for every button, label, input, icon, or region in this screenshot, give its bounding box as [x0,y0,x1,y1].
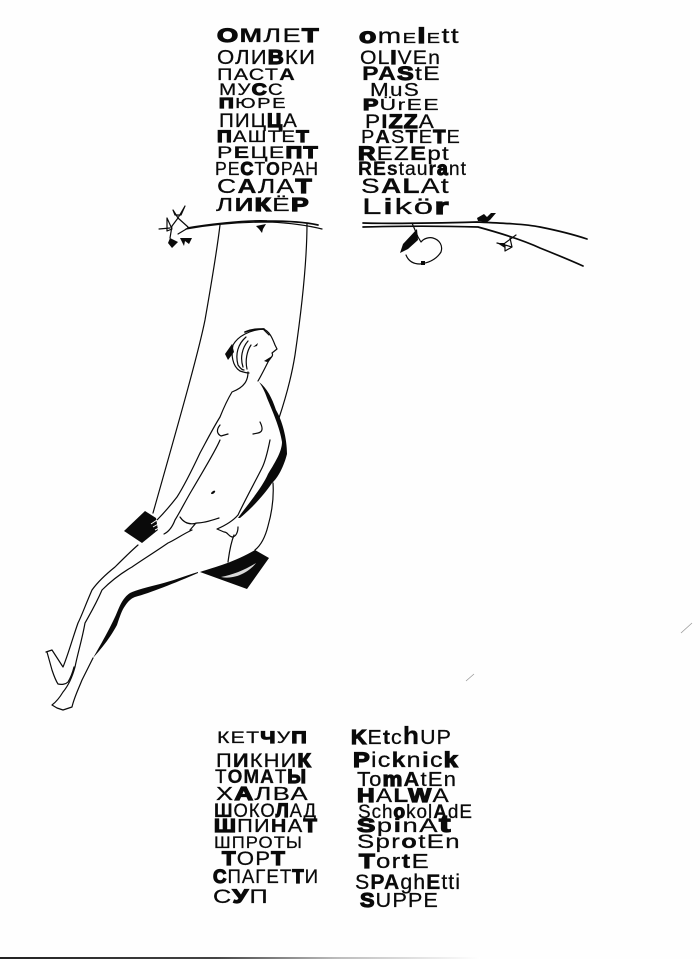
hair strands [232,330,269,373]
word list: top German column: SAL At [361,175,450,198]
word list: bottom German column: S p inA t [357,811,452,838]
branch: left with leaves [159,206,322,248]
word list: bottom Russian column: КЕТ ЧУП [217,728,308,747]
word list: bottom German column: Picknick [353,749,459,772]
word list: bottom German column: HALW A [357,786,450,807]
word list: top German column: PASTETE [361,127,461,147]
hand on seat [151,520,161,530]
word list: top German column: MuS [370,80,420,100]
word list: top German column: REstaurant [358,159,467,180]
word list: bottom German column: Tor tE [359,851,430,873]
swing rope: left [153,225,220,513]
inner arm and waist [217,440,270,537]
word list: bottom German column: SchokolAdE [358,802,473,823]
word list: bottom Russian column: Х А ЛВА [216,784,309,804]
word list: top German column: L ikö r [362,194,450,219]
word list: bottom Russian column: С УП [213,887,269,908]
word list: top German column [358,25,467,219]
word list: bottom Russian column: ШОКОЛАД [214,801,317,822]
word list: bottom German column: Spr otEn [357,832,461,853]
word list: top Russian column: П ЮРЕ [219,95,287,112]
word list: top German column: PA StE [362,64,441,85]
word list: bottom German column: TomAtEn [357,769,457,791]
icon: apple [400,223,442,265]
word list: top Russian column: Р Е ЦЕ П Т [217,143,319,162]
bottom edge shadow [0,957,480,959]
word list: bottom German column [351,722,473,912]
word list: top German column: REZ Ept [358,144,450,165]
shaded back [238,382,287,518]
swing seat: left [124,511,158,543]
leg: front [52,530,192,710]
word list: top German column: OLIVEn [360,48,441,69]
word list: bottom German column: SPAghEtti [355,871,461,894]
word list: top Russian column: Л И К Ё Р [216,195,310,215]
swing rope: right [279,223,307,418]
word list: bottom Russian column: ТОМАТЫ [215,767,307,788]
word list: bottom Russian column: ШПИ НАТ [214,816,318,836]
hair bun [225,344,234,360]
word list: bottom German column: SUPPE [360,890,439,912]
word list: top Russian column: ПАСТ А [217,65,296,84]
word list: top Russian column: ПИЦЦА [219,111,298,132]
swing seat: right [200,550,269,589]
word list: bottom Russian column: СПАГЕТТИ [213,867,319,888]
eye and mouth [253,343,272,362]
word list: top German column: PIZZ A [365,112,435,133]
leg: back [46,545,138,684]
word list: top Russian column [215,26,320,215]
hip [180,517,219,530]
word list: bottom German column: KEtchUP [351,722,452,750]
word list: top German column: P ÜrEE [363,96,440,114]
word list: bottom Russian column: ШПРОТЫ [214,833,303,852]
torso and arm [157,372,248,520]
word list: top Russian column: ОЛИВКИ [217,47,316,69]
word list: top German column: om ElEtt [359,25,460,48]
figure: woman on swing [46,329,287,710]
word list: top Russian column: САЛА Т [217,176,313,198]
word list: bottom Russian column: ТОР Т [222,849,286,870]
word list: top Russian column: ПАШТЕ Т [217,127,310,146]
word list: top Russian column: О М ЛЕ Т [217,26,320,47]
word list: bottom Russian column [213,728,319,908]
head [233,329,277,381]
word list: top Russian column: РЕСТОРАН [215,159,319,179]
specks [466,623,692,681]
word list: bottom Russian column: ПИКНИ К [216,751,312,772]
breasts and navel [217,422,262,436]
word list: top Russian column: МУ СС [219,80,284,99]
branch: right with leaves [363,213,587,266]
